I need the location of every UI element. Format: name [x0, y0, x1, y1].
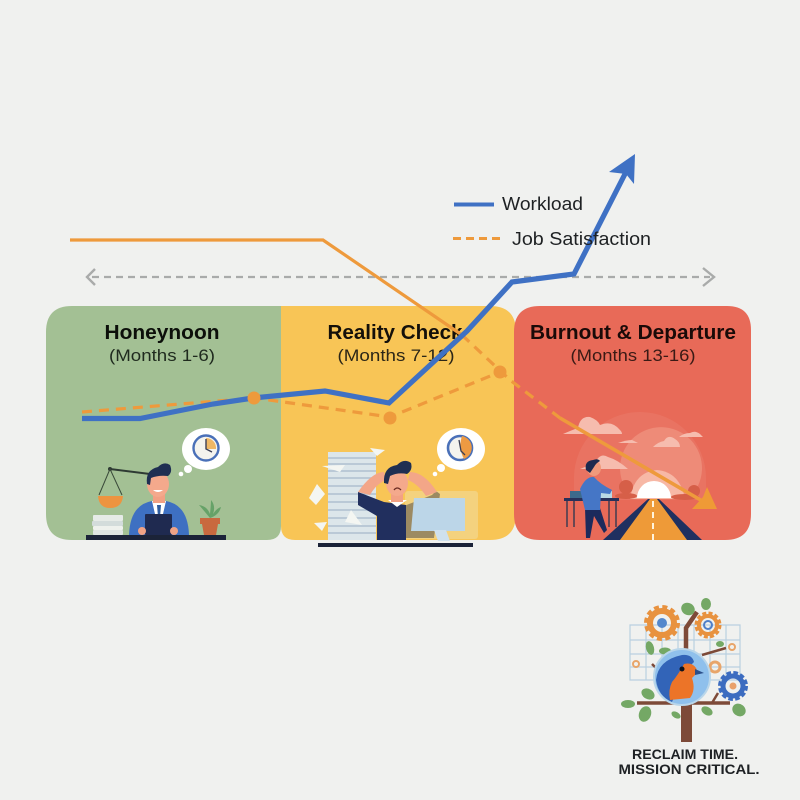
blue gear — [720, 673, 746, 699]
illustration: overwhelmed worker — [309, 428, 485, 547]
desk — [86, 535, 226, 540]
figure: departing worker — [580, 459, 612, 538]
icon: clouds — [563, 417, 703, 469]
heading: burnout and departure: Burnout & Departure — [530, 322, 736, 344]
bird medallion — [654, 649, 710, 705]
logo: bird in tree — [618, 598, 760, 777]
legend — [453, 194, 651, 249]
icon: sunset glow — [574, 412, 706, 500]
heading: reality check: Reality Check — [328, 322, 463, 344]
marker: honeymoon point — [248, 392, 260, 404]
icon: clock thought bubble — [433, 428, 485, 476]
line: job satisfaction dashed — [82, 372, 500, 417]
illustration: departure road at sunset — [563, 412, 706, 540]
logo tagline — [618, 746, 760, 777]
illustration: honeymoon worker at desk — [86, 428, 230, 540]
icon: paper stack — [92, 515, 123, 535]
icon: potted plant — [199, 500, 221, 535]
icon: computer monitor — [411, 498, 465, 541]
icon: road — [603, 499, 702, 540]
logo tagline: MISSION CRITICAL. — [618, 761, 760, 777]
icon: table — [564, 491, 619, 527]
subheading: months 13-16: (Months 13-16) — [570, 346, 696, 365]
line: workload — [82, 172, 626, 418]
subheading: months 7-12: (Months 7-12) — [338, 346, 454, 365]
icon: balance scale — [98, 467, 150, 508]
icon: paper pile — [309, 448, 385, 540]
icon: autumn trees — [615, 480, 700, 500]
arrowhead: workload — [609, 154, 635, 184]
icon: clock thought bubble — [179, 428, 230, 476]
marker: burnout point — [494, 366, 506, 378]
logo tagline: RECLAIM TIME. — [632, 746, 738, 762]
legend: job satisfaction: Job Satisfaction — [512, 229, 651, 249]
arrowhead: job satisfaction — [692, 487, 717, 509]
figure: worker holding head — [358, 461, 478, 540]
leaves — [621, 598, 748, 724]
figure: smiling worker — [129, 463, 189, 535]
timeline arrow — [87, 268, 714, 286]
marker: reality check point — [384, 412, 396, 424]
legend: workload — [454, 194, 583, 214]
tree trunk and branches — [637, 612, 730, 742]
chart: workload and job satisfaction lines — [70, 154, 717, 509]
panel: honeymoon — [46, 306, 281, 540]
legend: workload: Workload — [502, 194, 583, 214]
orange gears — [633, 607, 735, 672]
line: job satisfaction early, solid then dashed — [70, 240, 704, 502]
subheading: months 1-6: (Months 1-6) — [109, 346, 215, 365]
desk — [318, 543, 473, 547]
panel: reality check — [281, 306, 516, 540]
logo grid — [630, 625, 740, 680]
heading: honeymoon: Honeynoon — [104, 322, 220, 344]
panel: burnout and departure — [514, 306, 751, 540]
